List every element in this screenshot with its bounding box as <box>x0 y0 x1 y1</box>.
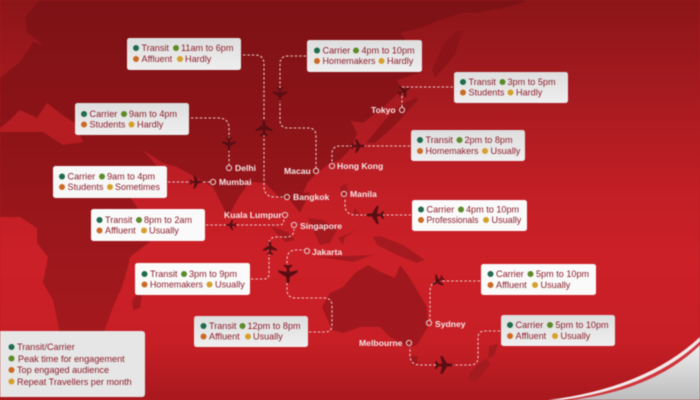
Eurasia and Africa landmass <box>0 0 527 335</box>
card: Carrier 5pm to 10pm Melbourne: Carrier <box>516 320 543 330</box>
card: Transit 8pm to 2am <box>91 209 205 241</box>
card: Carrier 5pm to 10pm Melbourne: Affluent <box>516 331 547 341</box>
city: Singapore: Singapore <box>300 221 342 231</box>
city: Macau: Macau <box>284 166 311 176</box>
card: Carrier 4pm to 10pm: Carrier <box>322 46 350 56</box>
card: Transit 12pm to 8pm: Usually <box>253 332 283 342</box>
card: Transit 2pm to 8pm: 2pm to 8pm <box>464 135 513 145</box>
card: Carrier 4pm to 10pm <box>307 40 422 72</box>
card: Carrier 5pm to 10pm Sydney <box>481 264 596 295</box>
Southeast Asian islands <box>270 183 373 262</box>
legend: Peak time for engagement <box>18 354 125 364</box>
card: Carrier 4pm to 10pm: Homemakers <box>322 56 376 66</box>
card: Carrier 4pm to 10pm: 4pm to 10pm <box>362 46 415 56</box>
city: Melbourne: Melbourne <box>359 338 403 348</box>
city: Delhi: Delhi <box>235 163 256 173</box>
plane: Delhi <box>222 137 236 151</box>
corner curve <box>548 337 700 400</box>
plane: Sydney <box>429 272 447 290</box>
Madagascar <box>132 288 143 310</box>
card: Carrier 9am to 4pm Students Hardly: Hardly <box>137 120 164 130</box>
city: Sydney: Sydney <box>435 319 466 329</box>
card: Transit 3pm to 9pm: 3pm to 9pm <box>189 269 237 279</box>
card: Carrier 5pm to 10pm Melbourne: Usually <box>560 331 591 341</box>
plane: Singapore <box>263 241 277 255</box>
card: Carrier 9am to 4pm Students Sometimes: 9am to 4pm <box>107 172 155 182</box>
Sakhalin <box>432 30 463 78</box>
card: Carrier 9am to 4pm Students Sometimes: Sometimes <box>115 182 160 192</box>
card: Transit 8pm to 2am: Usually <box>149 226 179 236</box>
card: Carrier 9am to 4pm Students Sometimes: Students <box>68 182 104 192</box>
card: Carrier 5pm to 10pm Melbourne <box>501 315 615 346</box>
legend: Repeat Travellers per month <box>17 377 132 387</box>
card: Transit 3pm to 5pm: 3pm to 5pm <box>508 77 556 87</box>
card: Transit 2pm to 8pm <box>411 130 525 161</box>
world map <box>0 0 527 382</box>
plane: Melbourne <box>435 356 453 374</box>
card: Transit 8pm to 2am: Transit <box>105 215 133 225</box>
card: Transit 8pm to 2am: 8pm to 2am <box>144 215 192 225</box>
New Guinea <box>373 236 425 263</box>
plane: Jakarta <box>279 265 297 283</box>
card: Carrier 4pm to 10pm Professionals: Usually <box>492 215 522 225</box>
card: Transit 12pm to 8pm <box>194 316 308 347</box>
plane: Tokyo <box>395 82 413 100</box>
card: Transit 12pm to 8pm: Affluent <box>209 332 240 342</box>
city: Jakarta: Jakarta <box>312 247 342 257</box>
card: Carrier 9am to 4pm Students Hardly: Carrier <box>90 109 117 119</box>
plane: Hong Kong <box>351 139 365 153</box>
card: Carrier 4pm to 10pm Professionals: Carrier <box>426 204 454 214</box>
card: Transit 3pm to 5pm: Hardly <box>516 88 543 98</box>
plane: Kuala Lumpur <box>226 220 236 230</box>
card: Carrier 4pm to 10pm: Hardly <box>387 56 414 66</box>
card: Transit 3pm to 9pm <box>135 263 250 295</box>
card: Carrier 4pm to 10pm Professionals: Professionals <box>426 215 479 225</box>
card: Carrier 9am to 4pm Students Sometimes: Carrier <box>68 172 95 182</box>
card: Carrier 9am to 4pm Students Hardly: Students <box>90 120 126 130</box>
card: Transit 11am to 6pm: Hardly <box>185 54 212 64</box>
legend: Top engaged audience <box>17 365 109 375</box>
New Zealand <box>469 344 498 382</box>
card: Transit 3pm to 9pm: Homemakers <box>150 280 203 290</box>
card: Transit 3pm to 5pm <box>454 72 568 103</box>
city: Mumbai: Mumbai <box>219 177 251 187</box>
city: Bangkok: Bangkok <box>293 192 330 202</box>
plane: Mumbai <box>190 176 202 188</box>
info cards <box>53 38 615 347</box>
city: Manila: Manila <box>350 189 377 199</box>
Japan <box>366 97 418 143</box>
card: Carrier 9am to 4pm Students Sometimes <box>53 166 167 198</box>
card: Carrier 5pm to 10pm Sydney: Usually <box>540 280 571 290</box>
card: Transit 8pm to 2am: Affluent <box>105 226 136 236</box>
card: Carrier 9am to 4pm Students Hardly <box>75 103 189 135</box>
card: Transit 11am to 6pm: 11am to 6pm <box>181 43 233 53</box>
card: Transit 3pm to 9pm: Usually <box>215 280 245 290</box>
city: Kuala Lumpur: Kuala Lumpur <box>224 210 282 220</box>
card: Carrier 5pm to 10pm Sydney: Carrier <box>496 269 524 279</box>
card: Transit 2pm to 8pm: Homemakers <box>426 146 479 156</box>
routes <box>168 55 500 365</box>
card: Carrier 5pm to 10pm Melbourne: 5pm to 10pm <box>556 320 609 330</box>
city markers and labels <box>210 105 466 348</box>
Australia <box>322 265 428 347</box>
city: Tokyo: Tokyo <box>371 105 396 115</box>
card: Transit 2pm to 8pm: Transit <box>426 135 453 145</box>
card: Transit 12pm to 8pm: Transit <box>209 321 237 331</box>
plane: Bangkok <box>256 120 272 136</box>
legend: Transit/Carrier <box>17 342 75 352</box>
card: Carrier 5pm to 10pm Sydney: Affluent <box>496 280 527 290</box>
airplanes <box>190 82 453 374</box>
Mediterranean Sea <box>0 103 83 145</box>
card: Transit 3pm to 9pm: Transit <box>150 269 178 279</box>
city: Hong Kong: Hong Kong <box>337 161 383 171</box>
plane: Macau <box>273 87 287 101</box>
legend <box>0 331 145 397</box>
card: Transit 11am to 6pm: Affluent <box>142 54 173 64</box>
card: Transit 2pm to 8pm: Usually <box>490 146 521 156</box>
card: Transit 11am to 6pm <box>127 38 241 70</box>
card: Transit 3pm to 5pm: Transit <box>468 77 496 87</box>
card: Carrier 5pm to 10pm Sydney: 5pm to 10pm <box>536 269 589 279</box>
card: Carrier 4pm to 10pm Professionals <box>412 200 527 231</box>
card: Carrier 4pm to 10pm Professionals: 4pm to 10pm <box>466 204 519 214</box>
card: Transit 12pm to 8pm: 12pm to 8pm <box>248 321 301 331</box>
card: Transit 3pm to 5pm: Students <box>468 88 505 98</box>
plane: Manila <box>366 206 384 224</box>
card: Carrier 9am to 4pm Students Hardly: 9am to 4pm <box>129 109 177 119</box>
card: Transit 11am to 6pm: Transit <box>142 43 169 53</box>
Tasmania <box>410 356 418 365</box>
